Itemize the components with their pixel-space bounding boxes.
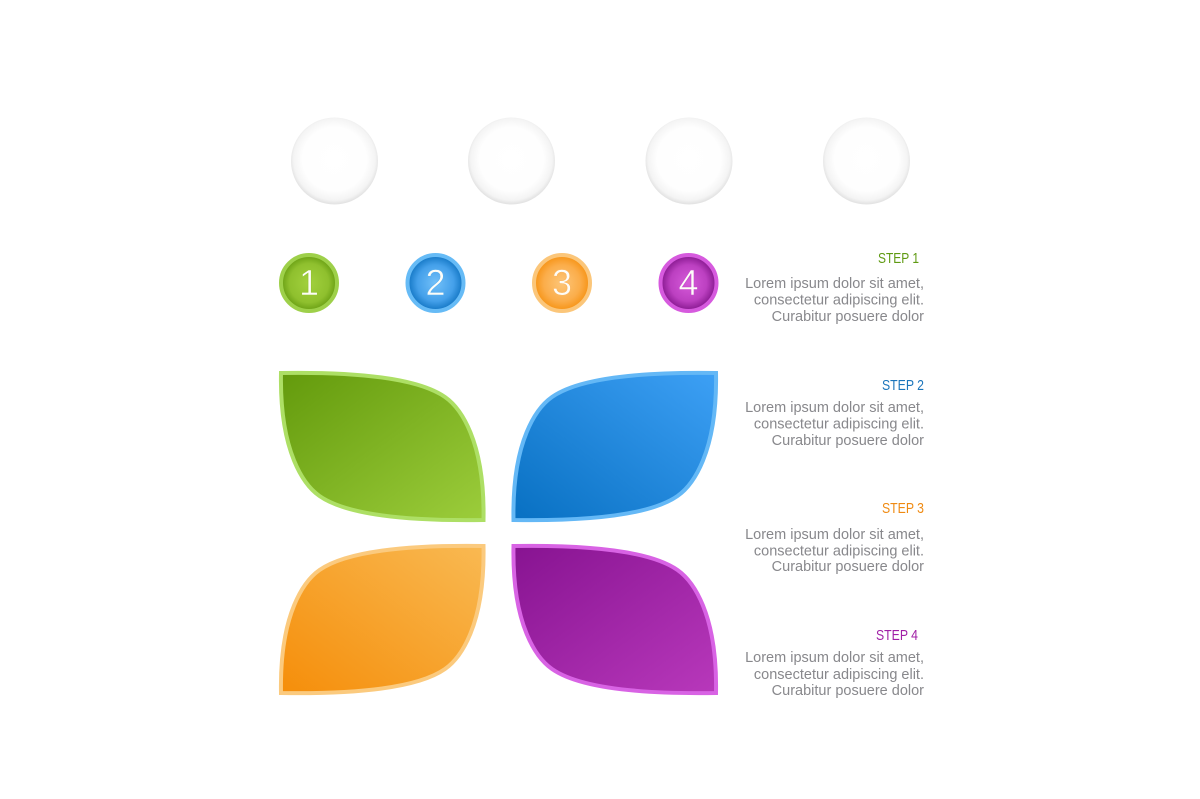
text block: step 3 <box>745 500 924 575</box>
badge 3 <box>534 255 590 311</box>
badge 4 <box>660 255 716 311</box>
badge 2: 2 <box>425 262 446 303</box>
step 4 body: consectetur adipiscing elit. <box>754 667 924 683</box>
badge 2 <box>408 255 464 311</box>
step 2 body: consectetur adipiscing elit. <box>754 416 924 432</box>
step 1 body: Curabitur posuere dolor <box>772 309 924 325</box>
four-leaf diagram <box>281 373 716 693</box>
placeholder circle 2 <box>468 118 555 204</box>
placeholder circle 1 <box>291 118 378 204</box>
badge 1 <box>281 255 337 311</box>
placeholder circles row <box>291 118 910 204</box>
text block: step 4 <box>745 627 924 699</box>
badge 1: 1 <box>299 262 319 303</box>
step 2 heading: STEP 2 <box>882 377 924 394</box>
step 2 body: Lorem ipsum dolor sit amet, <box>745 400 924 416</box>
leaf: orange <box>281 546 484 693</box>
step 3 body: Lorem ipsum dolor sit amet, <box>745 527 924 543</box>
step 4 heading: STEP 4 <box>876 627 918 644</box>
badge 4: 4 <box>678 262 699 303</box>
leaf: purple <box>513 546 716 693</box>
step 1 body: consectetur adipiscing elit. <box>754 292 924 308</box>
leaf: green <box>281 373 484 520</box>
step 3 body: Curabitur posuere dolor <box>772 559 924 575</box>
numbered badges row <box>281 255 716 311</box>
placeholder circle 3 <box>646 118 732 204</box>
step 4 body: Curabitur posuere dolor <box>772 683 924 699</box>
step 1 heading: STEP 1 <box>878 250 919 267</box>
badge 3: 3 <box>552 262 572 303</box>
step 3 body: consectetur adipiscing elit. <box>754 544 924 560</box>
step 1 body: Lorem ipsum dolor sit amet, <box>745 276 924 292</box>
step 4 body: Lorem ipsum dolor sit amet, <box>745 650 924 666</box>
leaf: blue <box>513 373 716 520</box>
text block: step 1 <box>745 250 924 325</box>
text block: step 2 <box>745 377 924 449</box>
step 3 heading: STEP 3 <box>882 500 924 517</box>
step 2 body: Curabitur posuere dolor <box>772 433 924 449</box>
placeholder circle 4 <box>823 118 910 204</box>
